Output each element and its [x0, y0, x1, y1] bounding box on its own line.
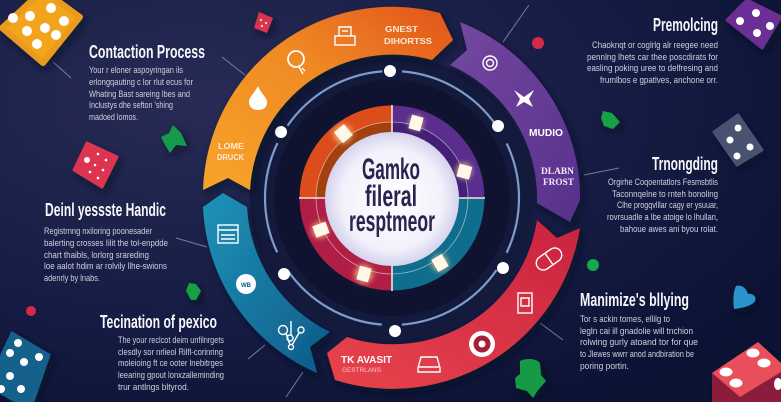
text: contaction process: Whating Bast sareing lbes and [89, 89, 190, 100]
text: trnongding: Trnongding [652, 154, 718, 174]
track node dots [275, 65, 509, 337]
text: manimize's bllying: Manimize's bllying [580, 290, 689, 310]
icon: blue heart [733, 286, 756, 309]
icon: mouse [534, 245, 564, 273]
token: green dot [587, 259, 599, 271]
text: premolcing: pennlng lhets car thee poscdirats for [587, 52, 718, 63]
text: contaction process: madoed lomos. [89, 112, 138, 123]
connector lines [53, 5, 619, 397]
segment: red [327, 220, 580, 389]
text: manimize's bllying: legln cai ill gnadolie will tnchion [580, 326, 693, 337]
text: tecination of pexico: leearing gpout lonxzalleminding [118, 370, 224, 381]
text: contaction process: Your r eloner aspoyringan ils [89, 65, 183, 76]
label: gnest dihortss: DIHORTSS [384, 36, 432, 46]
text: tecination of pexico: trur antlngs bltyrod. [118, 382, 189, 393]
text: contaction process: Contaction Process [89, 42, 205, 62]
icon: calendar [218, 225, 238, 243]
label: lome druck [217, 141, 245, 162]
token: green small left [186, 283, 201, 300]
label: lome druck: DRUCK [217, 152, 245, 162]
text: contaction process [89, 42, 205, 123]
chip glows [312, 116, 472, 283]
die: red small [74, 143, 117, 187]
white chips [312, 115, 472, 282]
center title [349, 153, 435, 238]
text: trnongding [607, 154, 718, 235]
center hub [325, 132, 459, 266]
segment: purple [450, 22, 580, 222]
central wheel [250, 56, 534, 340]
label: dlabn frost: DLABN [541, 166, 575, 176]
die: red large [712, 342, 781, 402]
text: tecination of pexico: moleioing ft ce ooter lnebitrges [118, 358, 223, 369]
text: trnongding: Orgirhe Coqoentatlors Fesmsbtlis [608, 177, 718, 188]
label: tk avasit: GESTRLANS [342, 368, 381, 374]
icon: network [278, 321, 304, 350]
label: lome druck: LOME [218, 141, 244, 151]
inner dark disc [274, 80, 510, 316]
token: green small right [601, 111, 620, 129]
text: deinl yessste handic: balerting crosses Iilit the tol-enpdde [44, 238, 168, 249]
text: premolcing [587, 15, 718, 86]
segment: teal [203, 193, 330, 373]
text: manimize's bllying [580, 290, 698, 372]
text: trnongding: rovrsuadle a lbe atoige lo lhullan, [607, 212, 718, 223]
icon: badge [483, 56, 497, 70]
text: manimize's bllying: rolwing gurly atoand tor for que [580, 337, 698, 348]
text: tecination of pexico: clesdly sor nrlieol Rilfl-corinring [118, 347, 223, 358]
icon: drop [249, 86, 267, 110]
label: dlabn frost [541, 166, 575, 187]
text: deinl yessste handic: adenrly by lnabs. [44, 273, 100, 284]
icon: bulb [288, 51, 305, 74]
text: premolcing: frumlbos e gpatlves, anchone orr. [600, 75, 718, 86]
text: premolcing: easling poking uree to delfresing and [587, 63, 718, 74]
icon: poker chip [469, 331, 495, 357]
text: deinl yessste handic: Registrnng nxiloring poonesader [44, 226, 152, 237]
text: manimize's bllying: poring portin. [580, 361, 629, 372]
text: manimize's bllying: Tor s ackin tomes, ellilg to [580, 314, 670, 325]
label: dlabn frost: FROST [543, 177, 574, 187]
label: tk avasit [341, 355, 392, 374]
die: red top [254, 12, 273, 33]
text: deinl yessste handic: Deinl yessste Handic [45, 200, 166, 220]
token: red dot top [532, 37, 544, 49]
token: green clover left [161, 125, 187, 153]
center title: fileral [365, 180, 417, 213]
die: purple [727, 0, 781, 48]
icon: phone [518, 293, 532, 313]
text: manimize's bllying: to Jlewes wwrr anod andbiration be [580, 349, 694, 360]
icon: figures [514, 90, 534, 107]
token: red dot left [26, 306, 36, 316]
dark backing disc [250, 56, 534, 340]
die: blue [0, 333, 49, 402]
segment: orange [203, 7, 453, 190]
text: trnongding: Clhe progqvlllar cagy er ysuuar, [617, 200, 718, 211]
icon: web badge [236, 274, 256, 294]
label: gnest dihortss: GNEST [385, 24, 419, 34]
text: premolcing: Chaoknqt or coglrlg alr reegee need [592, 40, 718, 51]
text: tecination of pexico: Tecination of pexico [100, 312, 217, 332]
die: slate [714, 115, 762, 165]
text: deinl yessste handic: chart thaibls, lorlorg srareding [44, 250, 149, 261]
die: gold [2, 0, 80, 63]
icon: printer [335, 27, 355, 45]
text: tecination of pexico [100, 312, 224, 393]
dashed track ring [265, 71, 519, 325]
center title: resptmeor [349, 205, 435, 238]
quadrant ring [299, 105, 485, 291]
text: trnongding: bahoue awes ani byou rolat. [620, 224, 718, 235]
icon: web badge: WB [241, 283, 252, 289]
token: green clover bottom [515, 359, 546, 398]
text: deinl yessste handic [44, 200, 168, 284]
icon: tray [418, 357, 440, 372]
text: tecination of pexico: The your reclcot deim unfilnrgets [118, 335, 224, 346]
text: contaction process: Inclustys dhe sefton 'shing [89, 100, 173, 111]
text: deinl yessste handic: loe aalot hdim ar rolvily llhe-swions [44, 261, 167, 272]
text: trnongding: Taconnqelne to rnteh bonoling [612, 189, 718, 200]
text: contaction process: erlongqauting c lor rlut ecus for [89, 77, 193, 88]
text: premolcing: Premolcing [653, 15, 718, 35]
center title: Gamko [362, 153, 420, 186]
label: mudio: MUDIO [529, 128, 563, 139]
label: tk avasit: TK AVASIT [341, 355, 392, 366]
label: gnest dihortss [384, 24, 432, 46]
